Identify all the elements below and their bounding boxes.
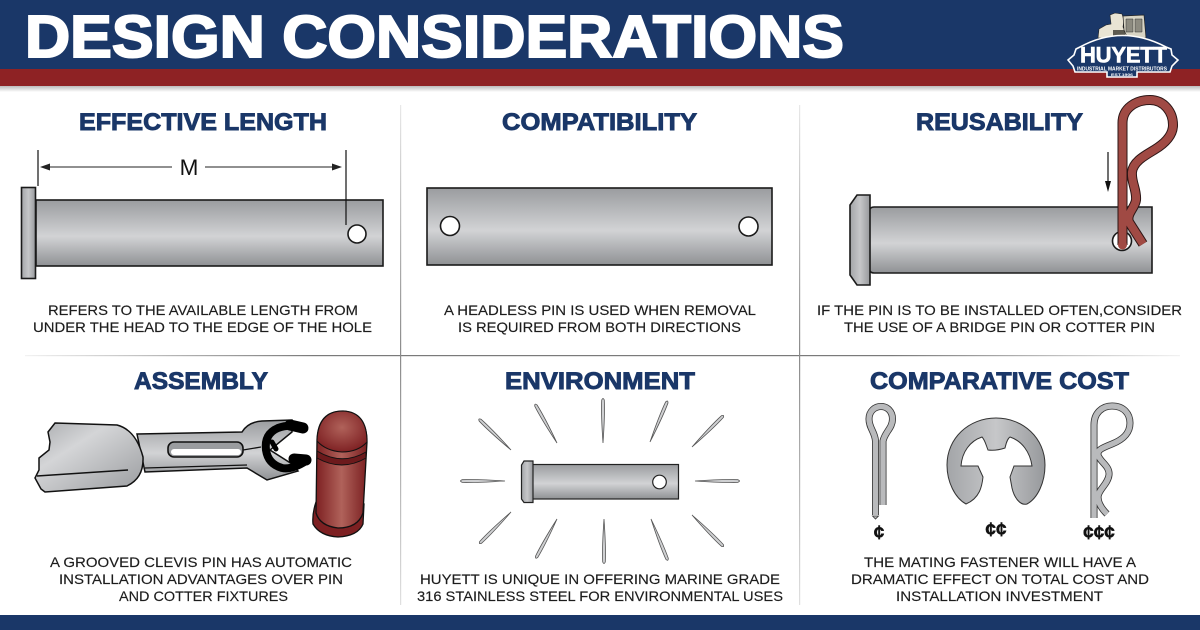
icon: e-clip <box>947 418 1045 541</box>
panel: assembly <box>35 368 367 604</box>
shining pin illustration <box>460 398 740 564</box>
pin illustration with M dimension: M <box>180 155 198 180</box>
description: THE USE OF A BRIDGE PIN OR COTTER PIN <box>844 319 1155 335</box>
panel: comparative cost <box>851 368 1149 604</box>
description: A HEADLESS PIN IS USED WHEN REMOVAL <box>444 302 756 318</box>
description: 316 STAINLESS STEEL FOR ENVIRONMENTAL USES <box>417 588 783 604</box>
description: DRAMATIC EFFECT ON TOTAL COST AND <box>851 571 1149 587</box>
description <box>851 554 1149 604</box>
pin illustration with M dimension <box>22 150 383 278</box>
panel: reusability <box>817 100 1182 335</box>
description <box>33 302 372 335</box>
heading: ASSEMBLY <box>134 368 268 395</box>
description: REFERS TO THE AVAILABLE LENGTH FROM <box>48 302 358 318</box>
panel: effective length <box>22 109 383 335</box>
description <box>50 554 352 604</box>
description: A GROOVED CLEVIS PIN HAS AUTOMATIC <box>50 554 352 570</box>
heading: ENVIRONMENT <box>505 368 695 395</box>
pin with bridge clip illustration <box>850 100 1173 285</box>
logo: Huyett: INDUSTRIAL MARKET DISTRIBUTORS <box>1077 66 1168 72</box>
logo: Huyett <box>1068 13 1178 77</box>
icon: e-clip: ¢¢ <box>985 520 1007 541</box>
panel: grid dividers <box>25 105 1180 605</box>
heading: REUSABILITY <box>916 109 1083 136</box>
description: HUYETT IS UNIQUE IN OFFERING MARINE GRADE <box>420 571 780 587</box>
title: DESIGN CONSIDERATIONS <box>25 4 844 70</box>
description <box>817 302 1182 335</box>
description: THE MATING FASTENER WILL HAVE A <box>864 554 1137 570</box>
heading: COMPATIBILITY <box>502 109 697 136</box>
description <box>444 302 756 335</box>
description: IF THE PIN IS TO BE INSTALLED OFTEN,CONSIDER <box>817 302 1182 318</box>
header banner <box>0 0 1200 92</box>
icon: bridge pin: ¢¢¢ <box>1083 523 1115 544</box>
panel: environment <box>417 368 783 604</box>
description: AND COTTER FIXTURES <box>119 588 288 604</box>
headless pin illustration <box>427 188 772 265</box>
panel: compatibility <box>427 109 772 335</box>
footer bar <box>0 615 1200 630</box>
heading: COMPARATIVE COST <box>870 368 1129 395</box>
logo: Huyett: EST.1906 <box>1111 72 1134 77</box>
heading: EFFECTIVE LENGTH <box>79 109 327 136</box>
description: INSTALLATION ADVANTAGES OVER PIN <box>59 571 343 587</box>
description: IS REQUIRED FROM BOTH DIRECTIONS <box>458 319 741 335</box>
clevis fork and grooved pin illustration <box>35 411 367 537</box>
icon: bridge pin <box>1083 406 1130 544</box>
description: INSTALLATION INVESTMENT <box>896 588 1103 604</box>
icon: cotter pin: ¢ <box>874 523 885 544</box>
description: UNDER THE HEAD TO THE EDGE OF THE HOLE <box>33 319 372 335</box>
icon: cotter pin <box>869 406 892 544</box>
logo: Huyett: HUYETT <box>1080 42 1168 68</box>
description <box>417 571 783 604</box>
